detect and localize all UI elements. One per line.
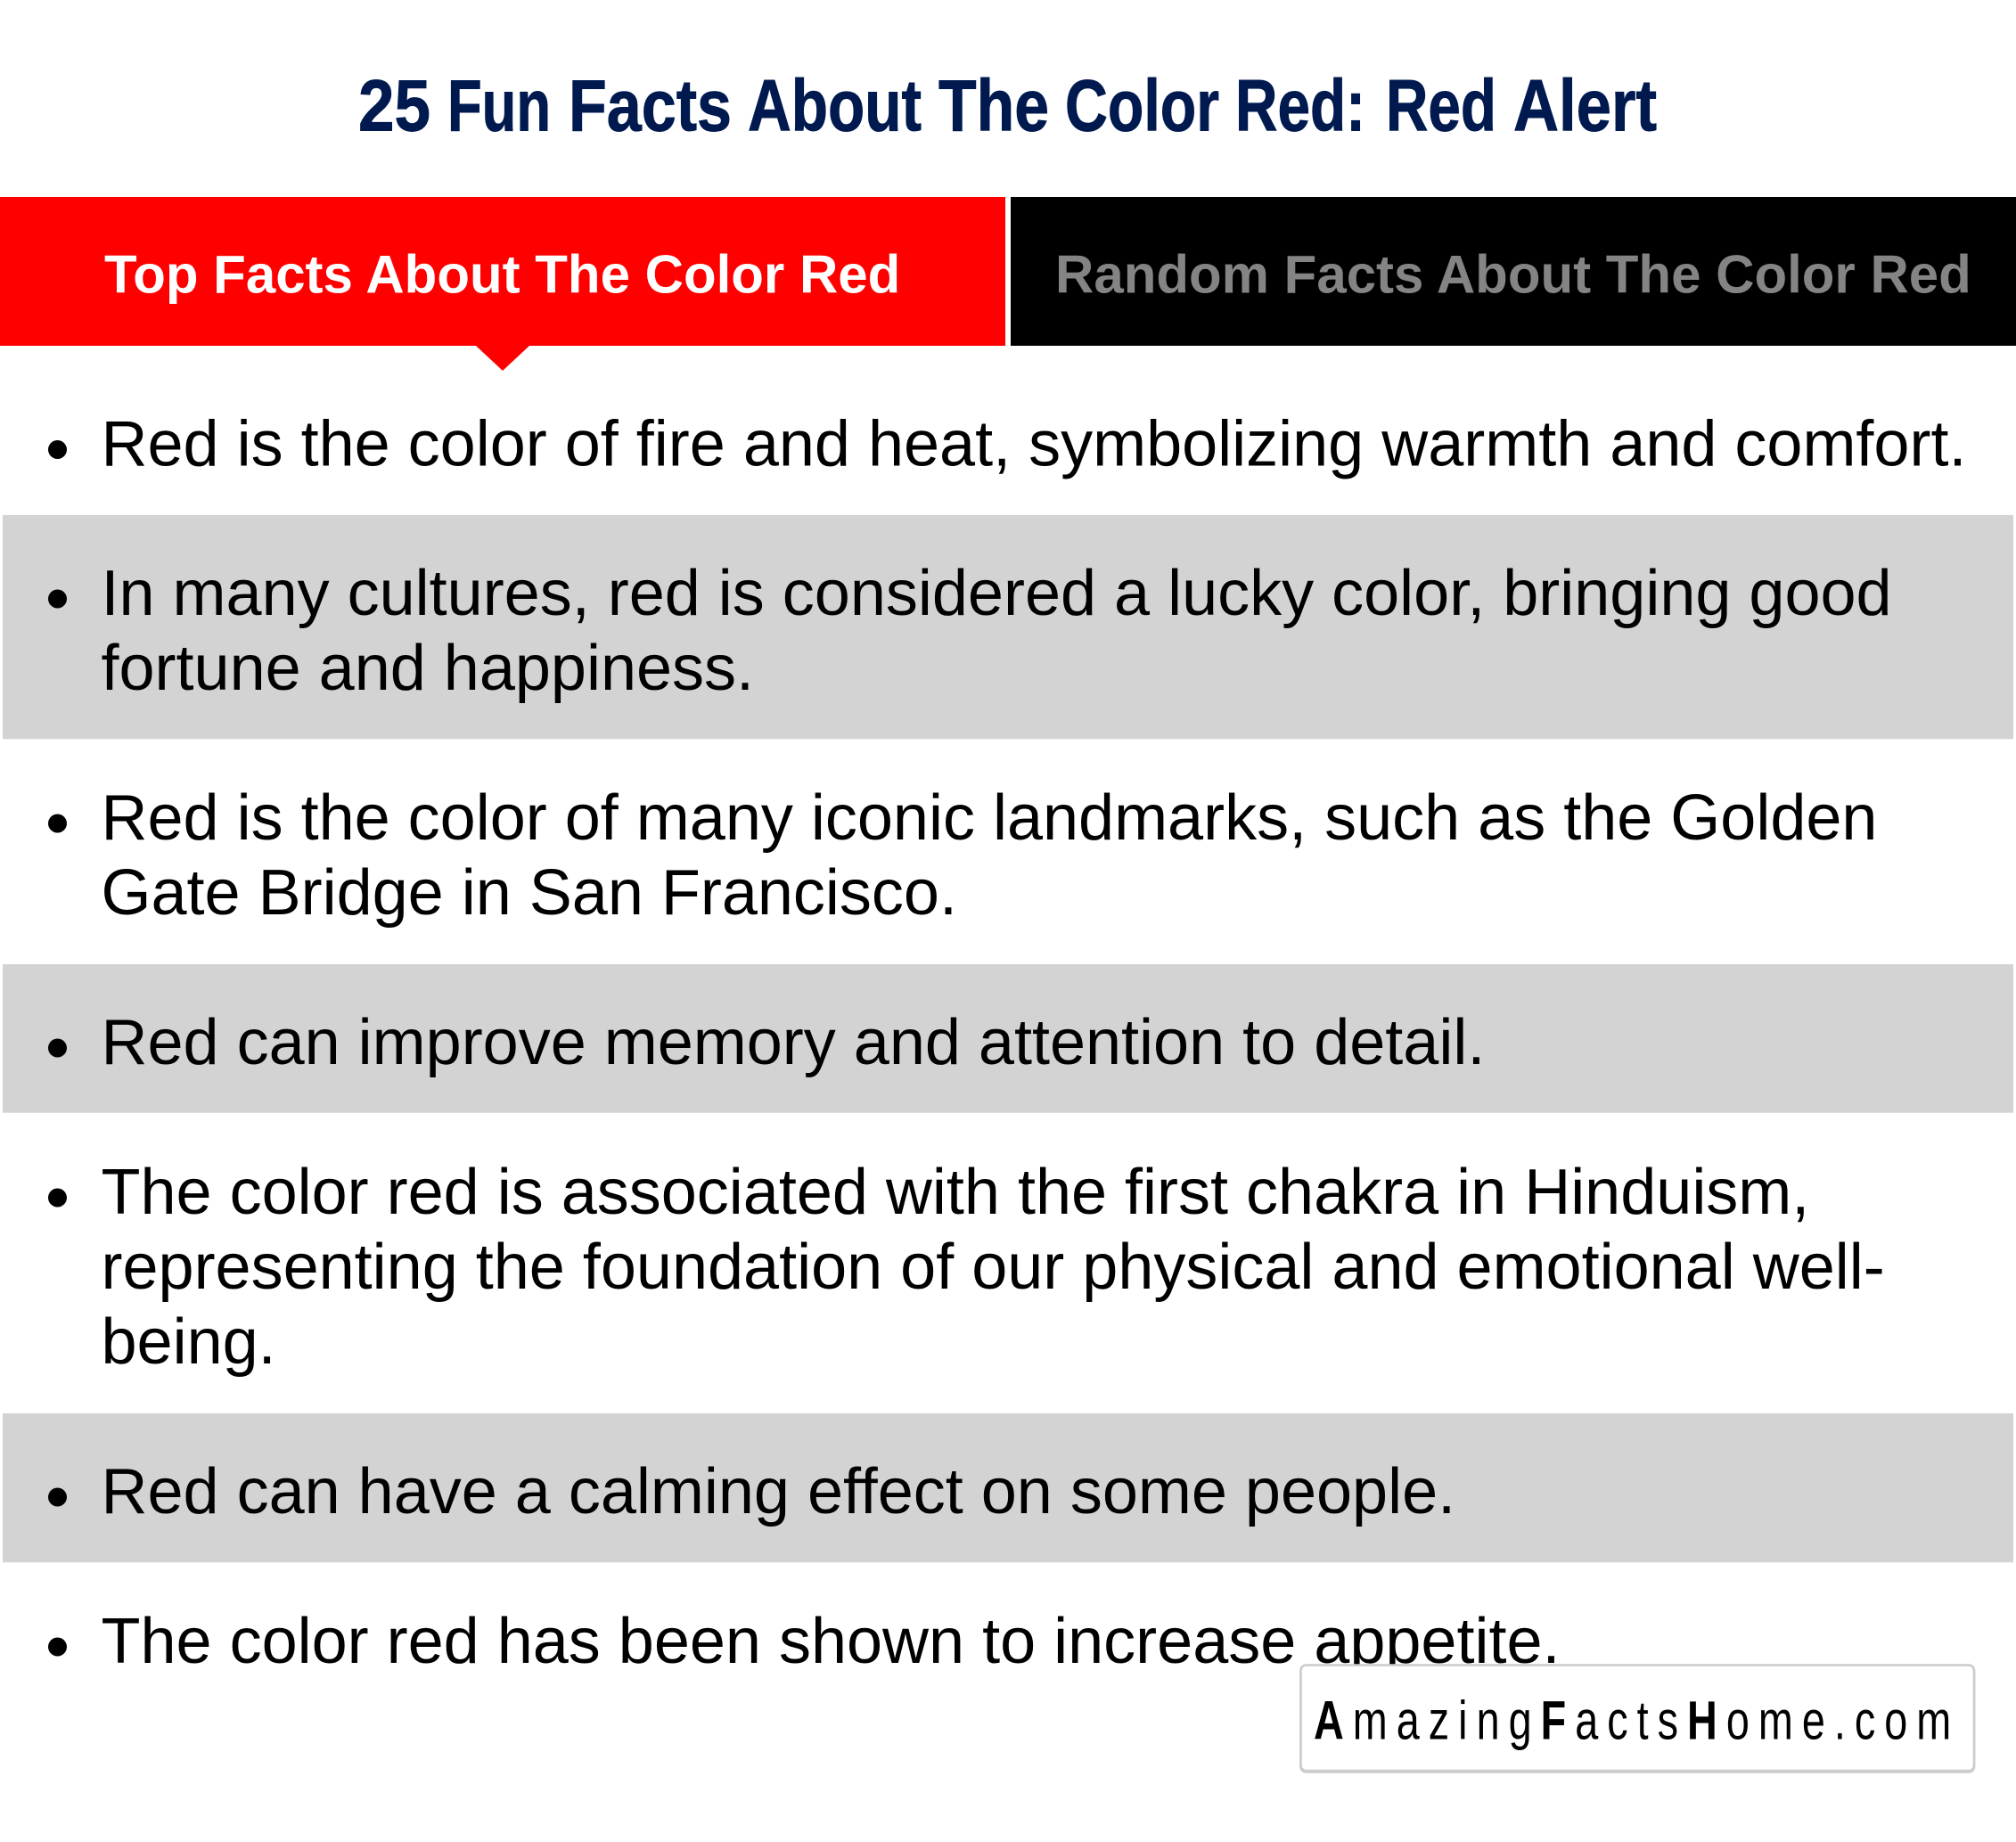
tab: top facts (active) (0, 197, 1005, 371)
fact 6 (3, 1413, 2013, 1562)
fact 3 (48, 782, 1877, 929)
fact 4: Red can improve memory and attention to detail. (102, 1007, 1485, 1078)
fact 2: fortune and happiness. (102, 633, 754, 704)
title: Red (1386, 66, 1496, 147)
title (358, 66, 1657, 147)
fact 1: Red is the color of fire and heat, symbolizing warmth and comfort. (102, 408, 1966, 479)
tab: random facts (inactive): Random Facts About The Color Red (1055, 245, 1971, 305)
title: Red: (1235, 66, 1365, 147)
watermark badge (1301, 1665, 1974, 1772)
fact 2: In many cultures, red is considered a lucky color, bringing good (102, 558, 1892, 629)
fact 4 (3, 964, 2013, 1113)
fact 6: Red can have a calming effect on some people. (102, 1456, 1455, 1527)
fact 7: The color red has been shown to increase appetite. (102, 1606, 1561, 1677)
title: Color (1065, 66, 1219, 147)
title: About (748, 66, 922, 147)
fact 3: Red is the color of many iconic landmarks, such as the Golden (102, 782, 1877, 854)
tab: random facts (inactive) (1011, 197, 2016, 346)
tab: top facts (active): Top Facts About The Color Red (104, 245, 900, 305)
fact 5 (48, 1157, 1885, 1378)
title: Facts (569, 66, 732, 147)
title: Fun (447, 66, 551, 147)
fact 5: representing the foundation of our physical and emotional well- (102, 1232, 1885, 1303)
title: The (938, 66, 1049, 147)
watermark badge: AmazingFactsHome.com (1314, 1690, 1960, 1751)
fact 5: The color red is associated with the first chakra in Hinduism, (102, 1157, 1809, 1228)
fact 5: being. (102, 1306, 276, 1378)
fact 2 (3, 515, 2013, 739)
title: Alert (1513, 66, 1657, 147)
fact 3: Gate Bridge in San Francisco. (102, 857, 957, 929)
title: 25 (358, 66, 430, 147)
